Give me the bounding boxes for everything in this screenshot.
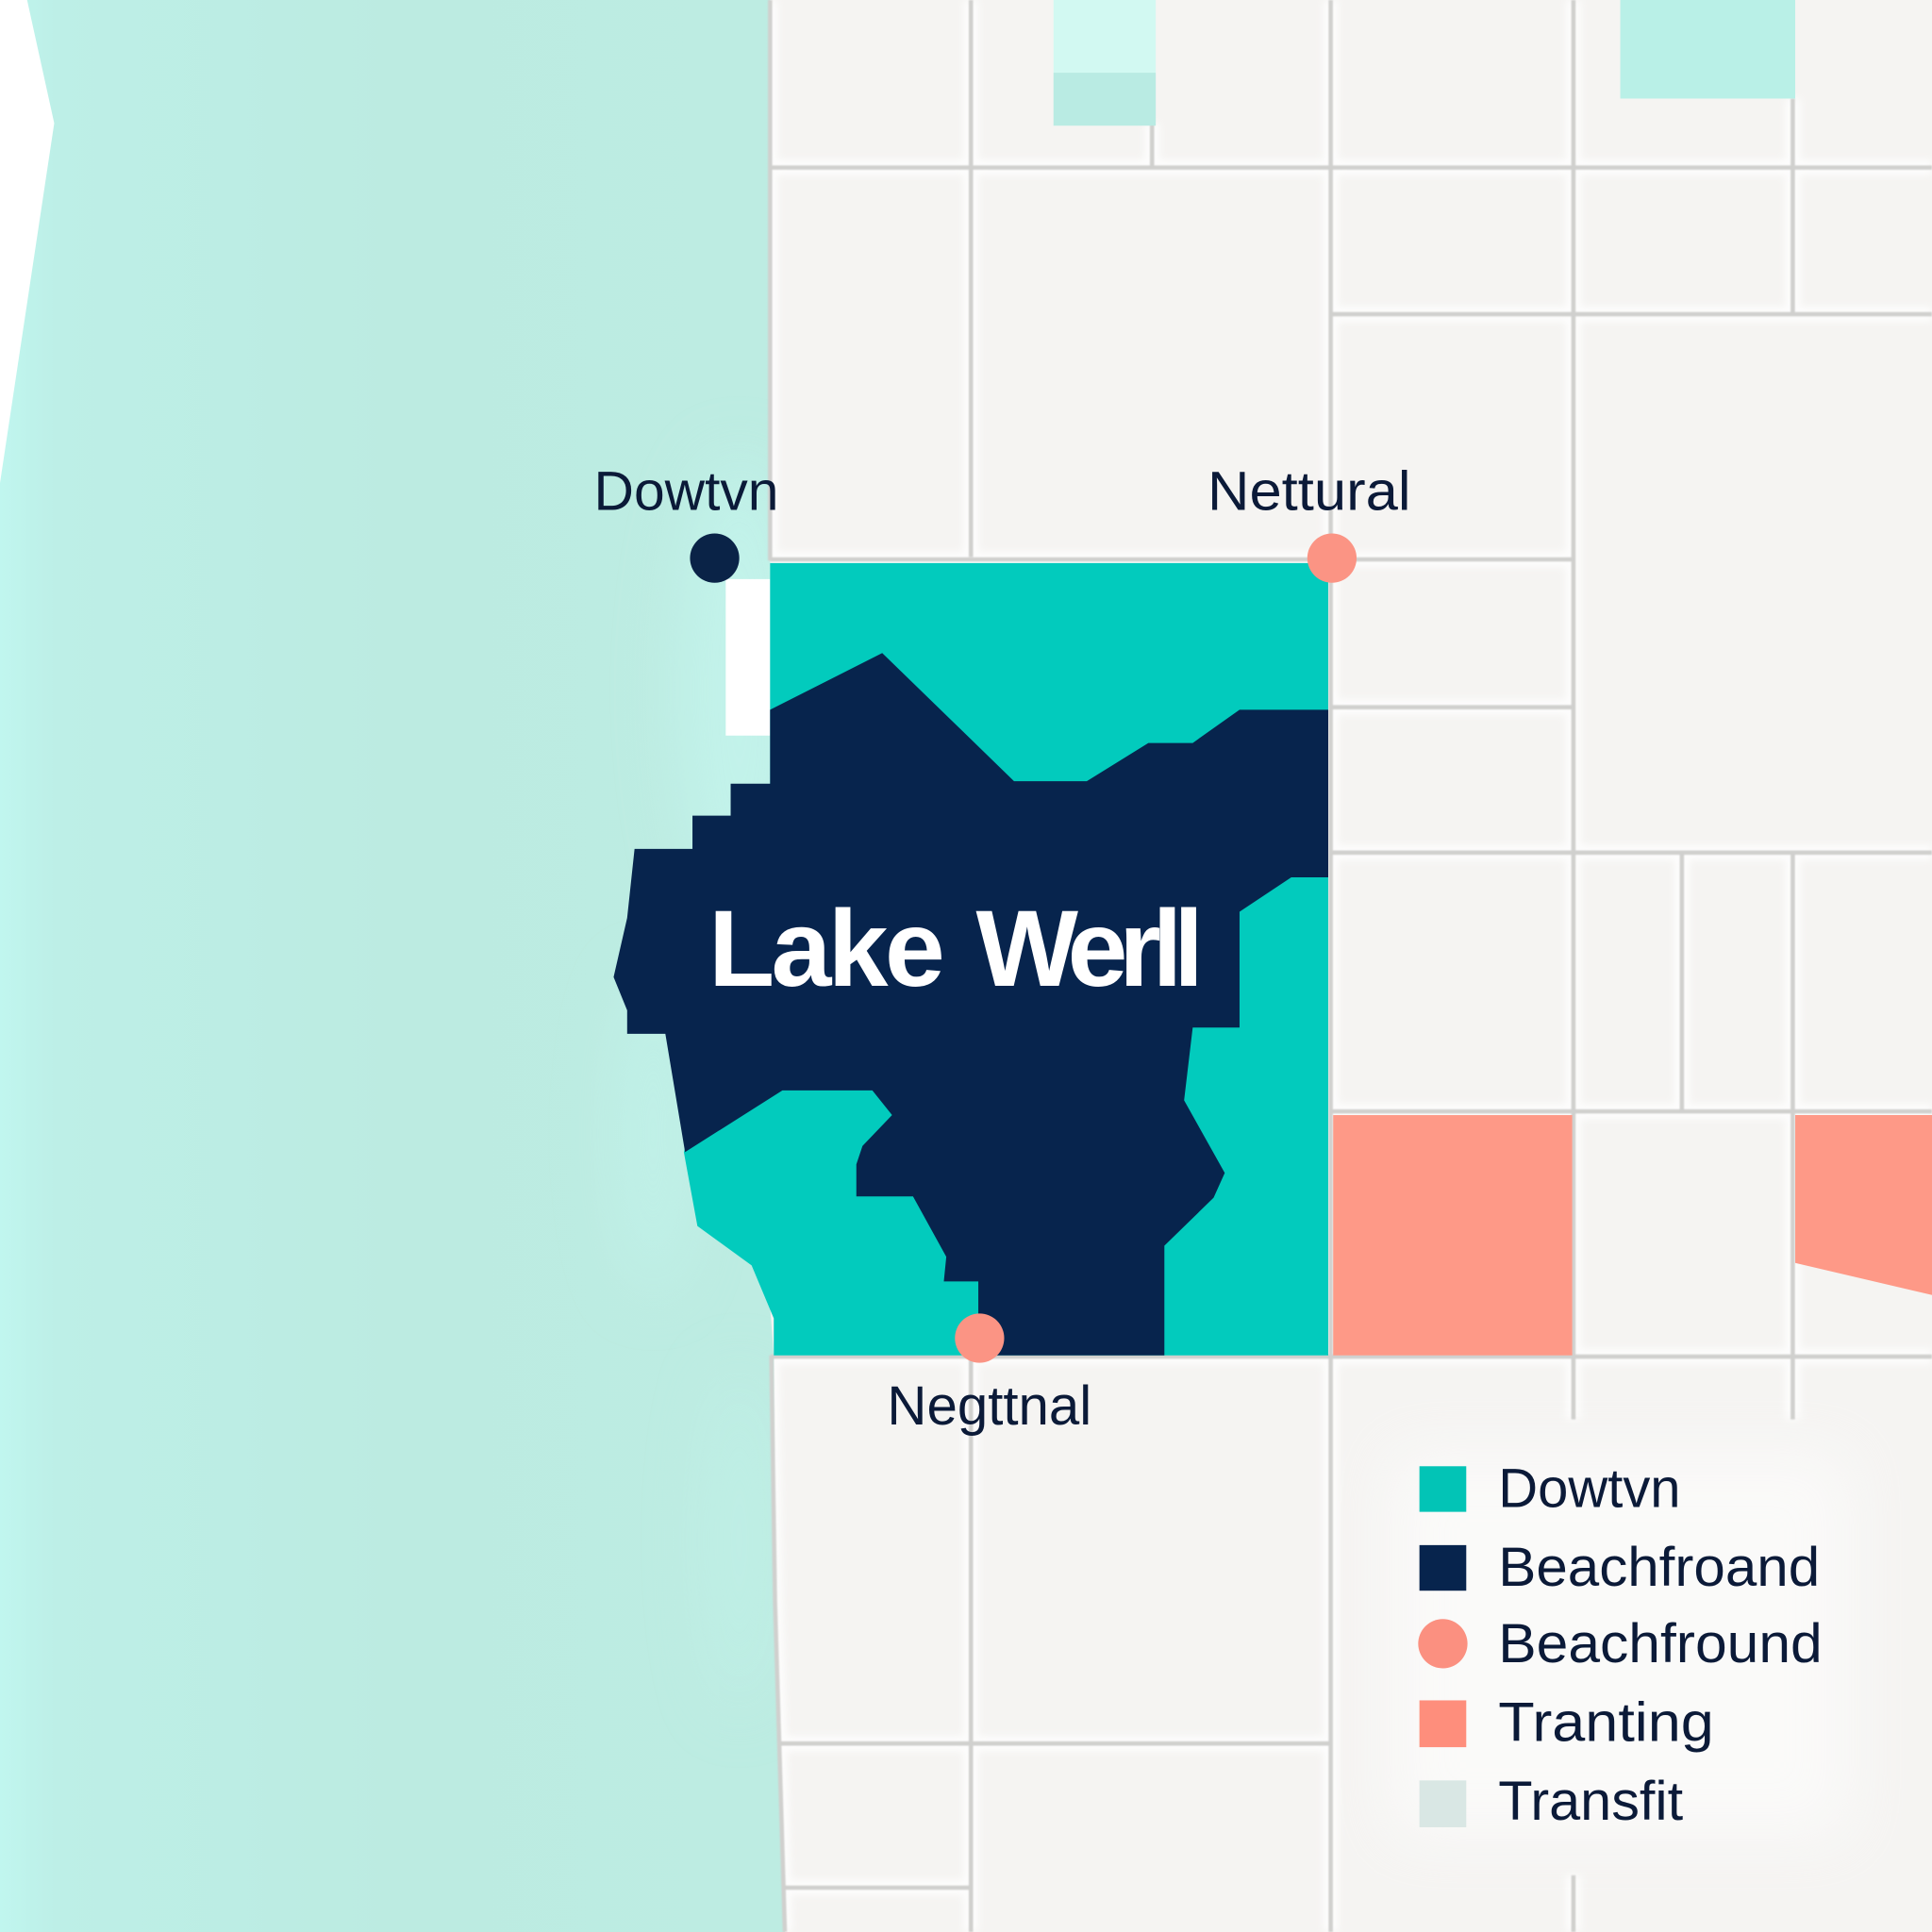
white strip (725, 579, 770, 736)
legend label: coral square: Tranting (1498, 1692, 1714, 1754)
district: teal downtown (684, 563, 1328, 1356)
legend swatch: grey (1420, 1780, 1466, 1827)
legend swatch: teal (1420, 1466, 1466, 1512)
legend label: teal: Dowtvn (1498, 1457, 1681, 1519)
legend backing (1392, 1454, 1848, 1836)
corner background (0, 0, 74, 492)
district: navy beachfront (613, 653, 1328, 1356)
legend swatch: navy (1420, 1545, 1466, 1591)
legend swatch: coral square (1420, 1700, 1466, 1747)
coral block: centre right (1333, 1115, 1573, 1356)
legend (1418, 1457, 1823, 1832)
marker: downtown (690, 534, 740, 583)
teal block: top right (1621, 0, 1795, 98)
legend label: navy: Beachfroand (1498, 1537, 1820, 1598)
marker: south (955, 1313, 1004, 1363)
coral block: far right (1795, 1115, 1932, 1295)
label: north east: Nettural (1208, 461, 1411, 523)
legend swatch: coral circle (1418, 1619, 1468, 1668)
legend label: grey: Transfit (1498, 1771, 1683, 1832)
marker: north east (1307, 534, 1357, 583)
legend label: coral circle: Beachfround (1498, 1613, 1823, 1674)
road grid (770, 0, 1932, 1932)
heading: district name: Lake (708, 889, 945, 1009)
road halo (770, 0, 1932, 1932)
water: lake (0, 0, 801, 1932)
label: downtown: Dowtvn (594, 461, 778, 523)
teal block: top centre (1054, 0, 1156, 125)
label: south: Negttnal (887, 1375, 1091, 1437)
heading: district name: Werll (975, 889, 1204, 1009)
